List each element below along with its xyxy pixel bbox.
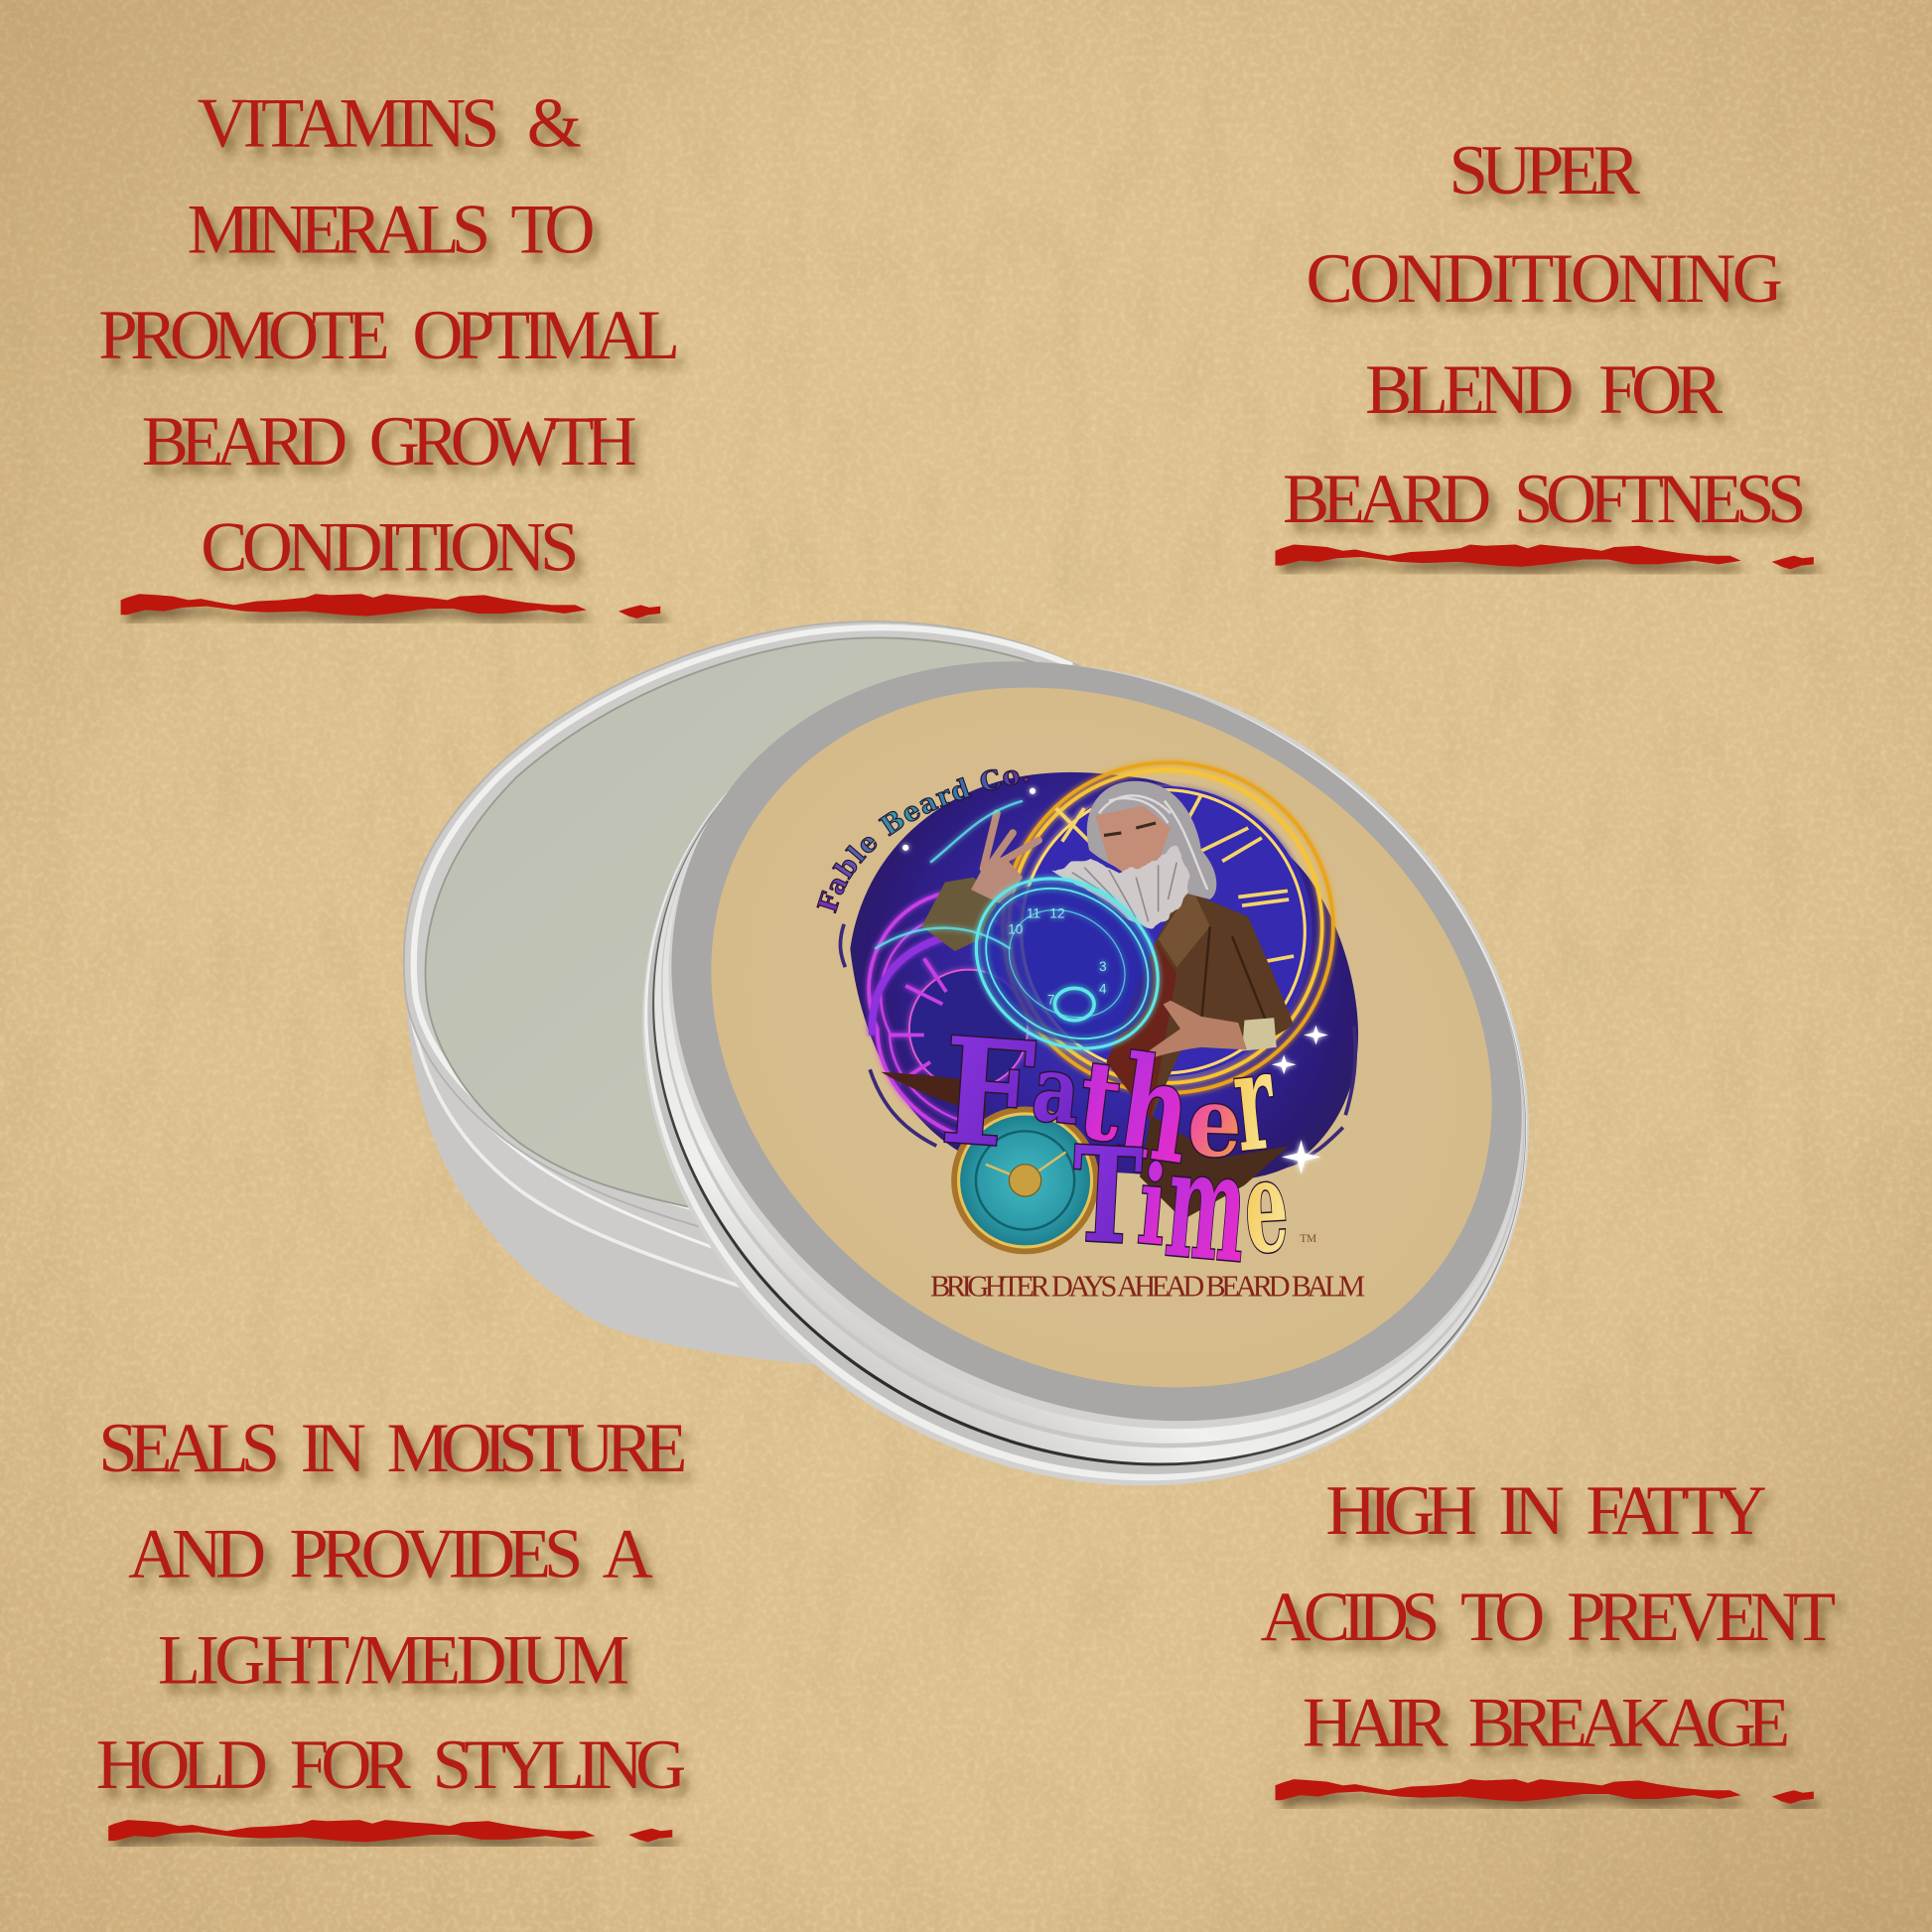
- text block: conditioning: CONDITIONING: [1307, 240, 1783, 318]
- magic clock numerals: [1008, 906, 1107, 1007]
- tin body: [405, 973, 986, 1368]
- red brush underline: [1276, 545, 1814, 569]
- raised left hand: [971, 813, 1038, 905]
- text block: vitamins: VITAMINS &: [198, 85, 582, 163]
- title: Father: t: [1072, 1035, 1129, 1167]
- white beard: [1052, 845, 1190, 929]
- magic clock numerals: 7: [1047, 992, 1055, 1007]
- callout: seals in moisture: [96, 1410, 688, 1842]
- magic clock numerals: 11: [1027, 906, 1040, 921]
- text block: conditioning: BLEND FOR: [1365, 351, 1724, 429]
- red brush underline: [121, 594, 660, 619]
- shirt cuff: [1242, 1018, 1277, 1051]
- man's brown coat: [1106, 890, 1294, 1120]
- title: Father: [936, 1005, 1282, 1195]
- paper label: [584, 549, 1619, 1526]
- title: Time: [1068, 1114, 1292, 1297]
- tin rim: [404, 621, 1109, 1235]
- text block: vitamins: BEARD GROWTH: [142, 403, 637, 481]
- text block: moisture and hold: LIGHT/MEDIUM: [158, 1621, 629, 1699]
- text block: conditioning: SUPER: [1449, 132, 1641, 209]
- title: Time: i: [1134, 1140, 1172, 1270]
- hair: [1087, 781, 1216, 899]
- title: Father: h: [1109, 1025, 1200, 1195]
- lid top metal ring: [533, 511, 1660, 1572]
- title: Time: m: [1160, 1114, 1254, 1297]
- text block: fatty acids: ACIDS TO PREVENT: [1261, 1579, 1836, 1656]
- title: Time: e: [1241, 1131, 1292, 1283]
- product name line: BRIGHTER DAYS AHEAD BEARD BALM: [930, 1270, 1365, 1304]
- callout: super conditioning: [1276, 132, 1814, 569]
- red brush underline: [108, 1820, 672, 1842]
- magic clock numerals: 3: [1099, 959, 1107, 974]
- magic clock numerals: 4: [1099, 981, 1107, 996]
- purple clock at left: [869, 891, 1057, 1140]
- text block: vitamins: [98, 85, 680, 587]
- magic clock numerals: 12: [1049, 906, 1065, 921]
- lid of the tin: [491, 503, 1680, 1645]
- text block: moisture and hold: HOLD FOR STYLING: [96, 1726, 686, 1804]
- coat tail and dark cape: [1140, 1115, 1289, 1220]
- sparkles: [902, 788, 1328, 1174]
- brush streaks: [840, 924, 1355, 1166]
- balm surface: [425, 637, 1109, 1210]
- text block: vitamins: PROMOTE OPTIMAL: [98, 297, 680, 374]
- product logo artwork: [816, 757, 1365, 1304]
- left sleeve: [921, 878, 998, 951]
- callout: fatty acids: [1261, 1472, 1836, 1804]
- trademark: TM: [1300, 1233, 1316, 1245]
- open tin base with balm: [404, 621, 1109, 1368]
- title: Father: F: [936, 1005, 1039, 1182]
- text block: conditioning: [1283, 132, 1806, 538]
- open right hand: [1140, 1001, 1247, 1062]
- title: Father: e: [1185, 1064, 1244, 1179]
- text block: conditioning: BEARD SOFTNESS: [1283, 461, 1806, 538]
- lid skirt with highlights: [491, 503, 1680, 1645]
- red brush underline: [1276, 1779, 1814, 1804]
- text block: fatty acids: [1261, 1472, 1836, 1762]
- title: Father: a: [1028, 1034, 1085, 1146]
- text block: vitamins: MINERALS TO: [188, 191, 595, 268]
- text block: vitamins: CONDITIONS: [201, 509, 579, 587]
- text block: moisture and hold: AND PROVIDES A: [128, 1516, 653, 1593]
- text block: fatty acids: HIGH IN FATTY: [1325, 1472, 1767, 1550]
- gold clock at back: [1003, 762, 1333, 1093]
- text block: moisture and hold: SEALS IN MOISTURE: [98, 1410, 688, 1487]
- text block: moisture and hold: [96, 1410, 688, 1804]
- callout: vitamins and minerals: [98, 85, 680, 619]
- pocket watch: [951, 1106, 1099, 1254]
- brush-shape galaxy backdrop: [850, 772, 1358, 1180]
- brand name arc: Fable Beard Co.: [816, 768, 1030, 913]
- magic clock numerals: 10: [1008, 922, 1024, 937]
- title: Father: r: [1226, 1018, 1282, 1183]
- tin thread groove: [405, 973, 986, 1294]
- face: [1095, 806, 1171, 880]
- cyan magic clock: [875, 801, 1191, 1083]
- text block: fatty acids: HAIR BREAKAGE: [1303, 1685, 1790, 1762]
- title: Time: T: [1068, 1118, 1145, 1275]
